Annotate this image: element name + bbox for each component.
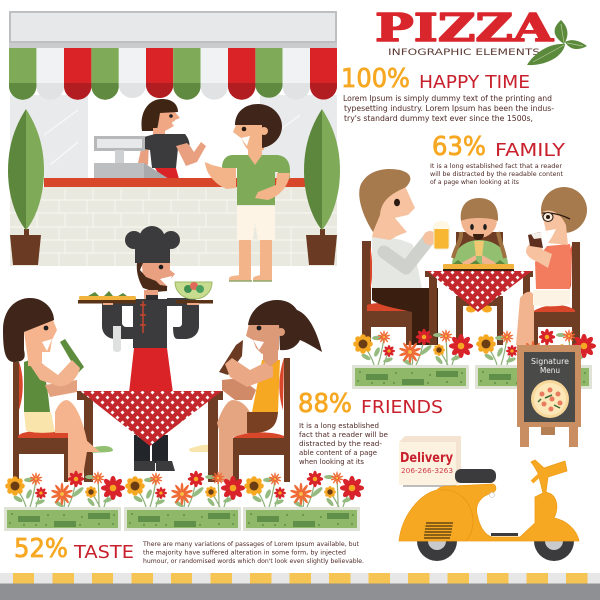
brick wall — [10, 187, 337, 266]
body text: when looking at its — [299, 458, 364, 466]
body text — [430, 162, 563, 186]
body text: typesetting industry. Lorem Ipsum has been the indus- — [344, 104, 554, 113]
stat: 63% family — [430, 132, 566, 186]
chef towel — [113, 326, 121, 352]
chef face and beard — [137, 263, 175, 299]
title: INFOGRAPHIC ELEMENTS — [388, 48, 540, 58]
footboard — [491, 533, 518, 536]
stat: 88% friends — [298, 389, 443, 466]
woman left with green bottle — [3, 298, 113, 482]
seat — [455, 469, 496, 483]
stat: 100% happy time: HAPPY TIME — [419, 72, 530, 93]
body text: humour, or randomised words which don't look even slightly believable. — [143, 557, 364, 565]
stat: 52% taste — [14, 534, 364, 565]
body text: will be distracted by the readable content — [430, 170, 563, 178]
body text: fact that a reader will be — [299, 431, 388, 439]
chair — [13, 362, 70, 482]
body text: It is a long established — [299, 422, 379, 430]
stat: 63% family: FAMILY — [495, 140, 566, 161]
chef trousers and shoes — [134, 435, 175, 471]
side panel line and vent — [424, 490, 473, 541]
table: main — [77, 391, 223, 482]
menu pizza — [531, 380, 569, 418]
chair — [233, 358, 290, 482]
title: PIZZA — [375, 5, 554, 50]
salad bowl tray — [175, 282, 213, 305]
delivery box — [399, 436, 461, 487]
family table — [425, 271, 533, 345]
father — [359, 169, 449, 345]
flower bed: bottom 1 — [4, 471, 125, 531]
body text: It is a long established fact that a reader — [430, 162, 562, 170]
cashier — [138, 99, 206, 179]
chef jacket and arms — [102, 295, 199, 348]
stat: 88% friends: FRIENDS — [361, 397, 443, 418]
daughter — [443, 198, 514, 312]
father chair — [362, 241, 412, 345]
signature menu board: Signature — [531, 357, 569, 366]
cash register — [94, 138, 169, 179]
flower bed: family left — [352, 329, 473, 389]
title — [375, 5, 554, 58]
counter — [44, 178, 305, 187]
flower bed: family right — [475, 329, 596, 389]
body text: try's standard dummy text ever since the 1500s, — [344, 114, 533, 123]
wheels — [417, 521, 574, 561]
awning — [9, 48, 337, 100]
shop sign board — [10, 12, 336, 42]
body text — [343, 94, 554, 123]
stat: 88% friends: 88% — [298, 389, 352, 419]
pizza tray — [78, 291, 136, 305]
body text — [142, 540, 364, 565]
handlebar — [532, 470, 545, 482]
chef waiter — [78, 226, 213, 471]
flower bed: bottom 2 — [124, 471, 245, 531]
delivery box: 206-266-3263 — [401, 467, 453, 475]
delivery box: Delivery — [400, 451, 453, 466]
body text: distracted by the read- — [299, 440, 383, 448]
panel: pizza shop — [8, 12, 340, 281]
signature menu board: Menu — [540, 366, 560, 375]
icon: basil leaves — [527, 20, 587, 65]
mother — [516, 187, 587, 345]
body text: able content of a page — [299, 449, 377, 457]
stat: 100% happy time: 100% — [341, 64, 410, 94]
stat: 52% taste: TASTE — [73, 542, 134, 563]
woman right with brown bottle — [189, 300, 322, 482]
chef hat — [125, 226, 180, 263]
scooter — [399, 460, 579, 561]
signature menu board — [517, 345, 581, 447]
body text — [299, 422, 388, 466]
body text: Lorem Ipsum is simply dummy text of the printing and — [343, 94, 552, 103]
customer — [205, 104, 290, 281]
plant: right — [304, 109, 340, 265]
scooter body — [399, 460, 579, 541]
body text: the majority have suffered alteration in some form, by injected — [143, 548, 346, 556]
shop window — [10, 95, 337, 180]
family scene — [359, 169, 587, 345]
road — [0, 573, 600, 600]
mother chair — [532, 242, 580, 345]
stat: 100% happy time — [341, 64, 554, 123]
stat: 63% family: 63% — [432, 132, 486, 162]
body text: There are many variations of passages of Lorem Ipsum available, but — [142, 540, 359, 548]
plant: left — [8, 109, 44, 265]
body text: of a page when looking at its — [430, 178, 520, 186]
daughter chair — [456, 232, 503, 345]
chef apron — [129, 348, 173, 393]
stat: 52% taste: 52% — [14, 534, 68, 564]
flower bed: bottom 3 — [243, 471, 364, 531]
